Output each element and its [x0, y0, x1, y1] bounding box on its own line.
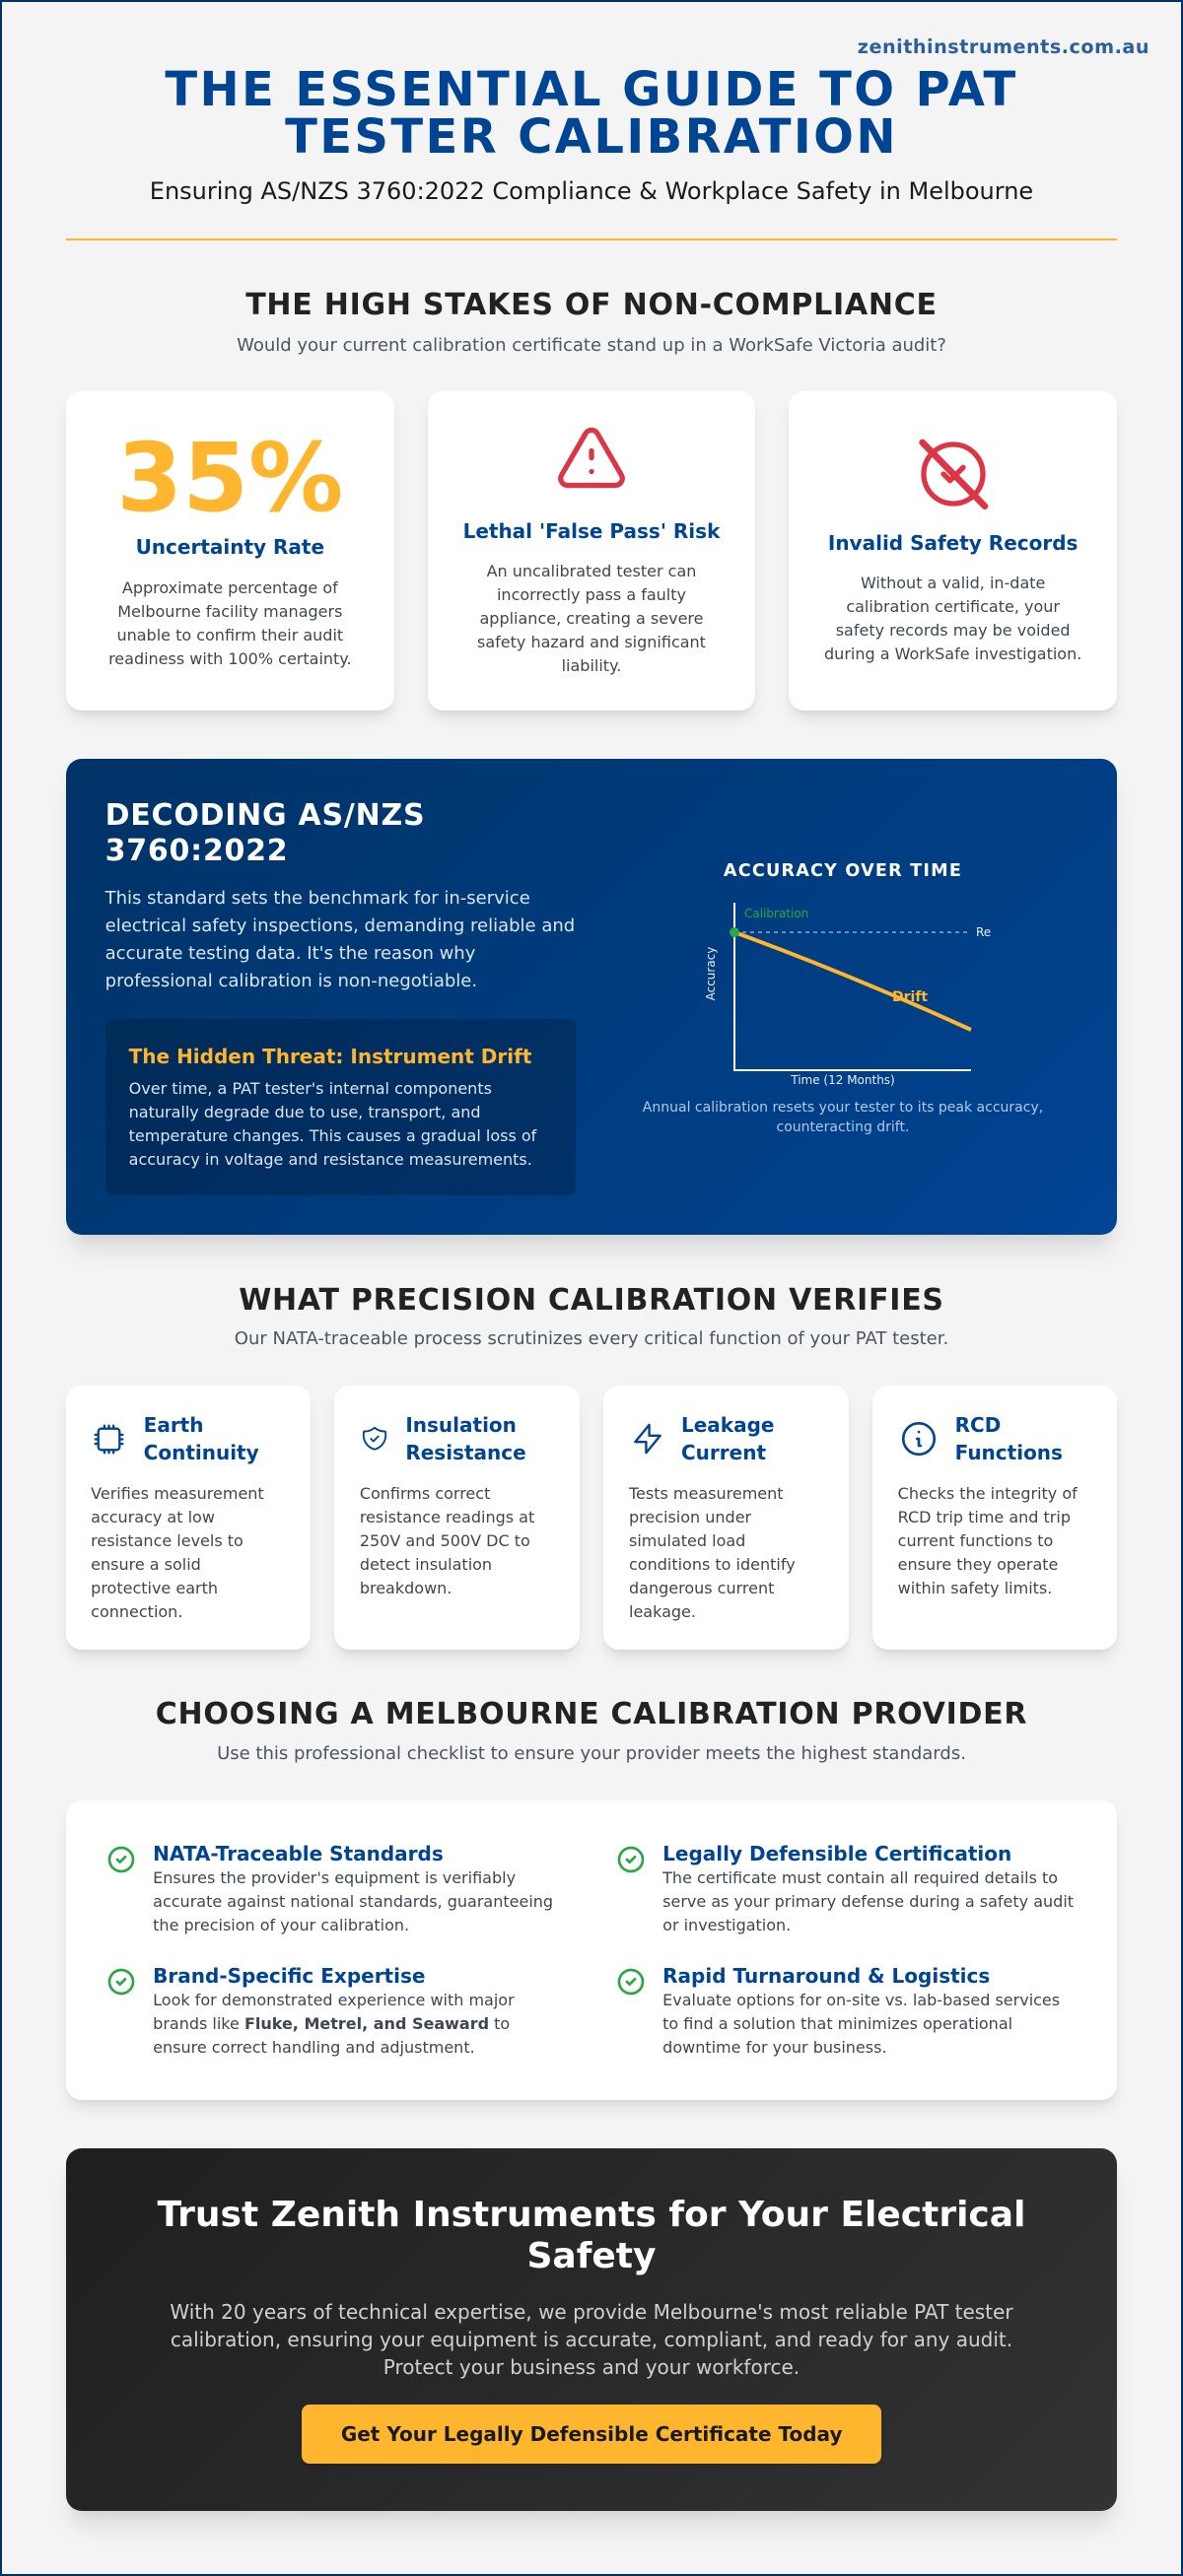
chart: accuracy over time: Time (12 Months) [790, 1073, 895, 1087]
card title: Current [681, 1441, 766, 1464]
card text [629, 1484, 796, 1621]
panel heading: DECODING AS/NZS [105, 798, 425, 833]
heading: high stakes: THE HIGH STAKES OF NON-COMPLIANCE [245, 288, 938, 322]
panel: call to action [66, 2148, 1117, 2511]
card title: Insulation [405, 1413, 517, 1437]
card text: during a WorkSafe investigation. [824, 644, 1081, 663]
panel text: professional calibration is non-negotiable. [105, 971, 477, 991]
item text: to find a solution that minimizes operational [662, 2014, 1012, 2033]
card text: breakdown. [360, 1579, 452, 1597]
card text: precision under [629, 1508, 751, 1526]
card text: unable to confirm their audit [116, 626, 343, 644]
panel: leakage current [603, 1386, 849, 1650]
item text: or investigation. [662, 1916, 791, 1934]
chart heading: ACCURACY OVER TIME [724, 861, 962, 881]
card text: Tests measurement [629, 1484, 784, 1503]
card text [477, 562, 706, 675]
card title: Invalid Safety Records [828, 531, 1078, 555]
card text [108, 578, 352, 668]
card text: safety hazard and significant [477, 633, 706, 651]
panel: rcd functions [872, 1386, 1117, 1650]
panel text: This standard sets the benchmark for in-service [105, 888, 530, 909]
item title: Rapid Turnaround & Logistics [662, 1964, 990, 1988]
cta button: Get Your Legally Defensible Certificate Today [341, 2422, 842, 2446]
checklist item: certification [617, 1842, 1074, 1934]
cta button [302, 2405, 881, 2464]
card text: readiness with 100% certainty. [108, 649, 352, 668]
card text: simulated load [629, 1531, 745, 1550]
card text: Confirms correct [360, 1484, 490, 1503]
panel: invalid records [789, 391, 1117, 711]
card text: dangerous current [629, 1579, 774, 1597]
card text: current functions to [898, 1531, 1053, 1550]
icon: info [901, 1422, 937, 1457]
title: TESTER CALIBRATION [285, 109, 898, 165]
item title: Brand-Specific Expertise [153, 1964, 425, 1988]
callout text: naturally degrade due to use, transport, and [129, 1103, 481, 1121]
card title: Uncertainty Rate [136, 535, 324, 559]
checklist item: turnaround [617, 1964, 1060, 2057]
heading: provider: CHOOSING A MELBOURNE CALIBRATION PROVIDER [156, 1697, 1027, 1731]
title: THE ESSENTIAL GUIDE TO PAT [165, 62, 1018, 117]
icon: check [617, 1969, 645, 1995]
cta text [170, 2300, 1013, 2379]
card text: calibration certificate, your [846, 597, 1060, 616]
card text: connection. [91, 1602, 182, 1621]
panel heading: 3760:2022 [105, 834, 288, 868]
card text: RCD trip time and trip [898, 1508, 1071, 1526]
card text: Without a valid, in-date [861, 574, 1045, 592]
panel: checklist [66, 1800, 1117, 2100]
chart: accuracy over time [704, 903, 991, 1087]
subtitle: Ensuring AS/NZS 3760:2022 Compliance & Workplace Safety in Melbourne [150, 177, 1033, 205]
card text: An uncalibrated tester can [487, 562, 696, 580]
card title [144, 1413, 259, 1464]
callout text: Over time, a PAT tester's internal components [129, 1079, 492, 1098]
icon: shield [363, 1427, 386, 1451]
cta text: Protect your business and your workforce. [383, 2355, 800, 2379]
icon: check [108, 1969, 134, 1995]
item text [153, 1868, 553, 1934]
panel: uncertainty rate [66, 391, 394, 711]
item text [662, 1868, 1074, 1934]
subheading: verifies: Our NATA-traceable process scrutinizes every critical function of your PAT tester. [235, 1328, 948, 1349]
subheading: provider: Use this professional checklist to ensure your provider meets the highest standards. [217, 1743, 966, 1764]
chart caption [643, 1100, 1043, 1135]
chart: accuracy over time: Calibration [744, 907, 808, 920]
card text: accuracy at low [91, 1508, 215, 1526]
card text: Approximate percentage of [122, 578, 338, 597]
chart: accuracy over time: Re [976, 925, 991, 939]
heading: verifies: WHAT PRECISION CALIBRATION VERIFIES [239, 1283, 944, 1318]
cta heading: Safety [526, 2236, 656, 2276]
checklist item: nata [108, 1842, 553, 1934]
chart: accuracy over time: Accuracy [704, 947, 718, 1000]
card text [360, 1484, 534, 1597]
card text: conditions to identify [629, 1555, 796, 1574]
item text [662, 1991, 1060, 2057]
title [165, 62, 1018, 165]
card title [955, 1413, 1063, 1464]
card text: protective earth [91, 1579, 218, 1597]
chart caption: counteracting drift. [777, 1119, 909, 1135]
item text: Look for demonstrated experience with major [153, 1991, 515, 2009]
card text [91, 1484, 264, 1621]
card title: RCD [955, 1413, 1001, 1437]
item text: Ensures the provider's equipment is verifiably [153, 1868, 516, 1887]
card text: Verifies measurement [91, 1484, 264, 1503]
panel: earth continuity [66, 1386, 311, 1650]
card text [824, 574, 1081, 663]
card text: liability. [562, 656, 621, 675]
card title: Functions [955, 1441, 1063, 1464]
icon: bolt [634, 1423, 661, 1455]
icon: crossed-out check [919, 440, 988, 509]
card title: Earth [144, 1413, 203, 1437]
item text: downtime for your business. [662, 2038, 887, 2057]
panel heading [105, 798, 425, 868]
item text: The certificate must contain all required details to [662, 1868, 1058, 1887]
cta text: calibration, ensuring your equipment is accurate, compliant, and ready for any audit. [171, 2328, 1012, 2351]
item text: serve as your primary defense during a safety audit [662, 1892, 1074, 1911]
card text: leakage. [629, 1602, 696, 1621]
card text: 250V and 500V DC to [360, 1531, 530, 1550]
card text: resistance levels to [91, 1531, 244, 1550]
card title: Continuity [144, 1441, 259, 1464]
card title: Leakage [681, 1413, 774, 1437]
card text [898, 1484, 1079, 1597]
item title: Legally Defensible Certification [662, 1842, 1011, 1865]
item text [153, 1991, 515, 2057]
card title: Resistance [405, 1441, 526, 1464]
callout text [129, 1079, 537, 1169]
icon: check [108, 1847, 134, 1872]
callout heading: The Hidden Threat: Instrument Drift [129, 1045, 531, 1068]
panel: decoding standard [66, 759, 1117, 1235]
icon: chip [95, 1425, 124, 1455]
panel text [104, 888, 575, 991]
callout text: accuracy in voltage and resistance measurements. [129, 1150, 532, 1169]
item title: NATA-Traceable Standards [153, 1842, 444, 1865]
panel text: accurate testing data. It's the reason why [105, 943, 475, 964]
big stat 35%: 35% [116, 423, 343, 533]
chart: accuracy over time: Drift [892, 989, 928, 1005]
icon: warning triangle [558, 428, 625, 489]
card text: detect insulation [360, 1555, 492, 1574]
checklist item: brands [108, 1964, 515, 2057]
card text: incorrectly pass a faulty [497, 585, 686, 604]
item text: ensure correct handling and adjustment. [153, 2038, 475, 2057]
cta text: With 20 years of technical expertise, we provide Melbourne's most reliable PAT tester [170, 2300, 1013, 2324]
panel: false pass risk [428, 391, 755, 711]
website url: zenithinstruments.com.au [858, 35, 1149, 58]
item text: accurate against national standards, guaranteeing [153, 1892, 553, 1911]
cta heading: Trust Zenith Instruments for Your Electrical [158, 2195, 1025, 2235]
panel text: electrical safety inspections, demanding reliable and [105, 915, 575, 936]
subheading: high stakes: Would your current calibration certificate stand up in a WorkSafe Victoria audit? [237, 335, 946, 356]
chart caption: Annual calibration resets your tester to its peak accuracy, [643, 1100, 1043, 1116]
item text: Evaluate options for on-site vs. lab-based services [662, 1991, 1060, 2009]
card text: ensure they operate [898, 1555, 1058, 1574]
callout: instrument drift [105, 1019, 576, 1195]
cta heading [158, 2195, 1025, 2276]
item text: brands like Fluke, Metrel, and Seaward to [153, 2014, 510, 2033]
callout text: temperature changes. This causes a gradual loss of [129, 1126, 536, 1145]
card text: appliance, creating a severe [479, 609, 703, 628]
card text: within safety limits. [898, 1579, 1052, 1597]
card title: Lethal 'False Pass' Risk [463, 519, 720, 543]
card text: Melbourne facility managers [117, 602, 342, 621]
card text: Checks the integrity of [898, 1484, 1078, 1503]
item text: the precision of your calibration. [153, 1916, 409, 1934]
icon: check [617, 1847, 645, 1872]
panel: insulation resistance [334, 1386, 580, 1650]
card text: ensure a solid [91, 1555, 201, 1574]
card text: resistance readings at [360, 1508, 534, 1526]
card title [405, 1413, 526, 1464]
card title [681, 1413, 774, 1464]
card text: safety records may be voided [836, 621, 1071, 640]
